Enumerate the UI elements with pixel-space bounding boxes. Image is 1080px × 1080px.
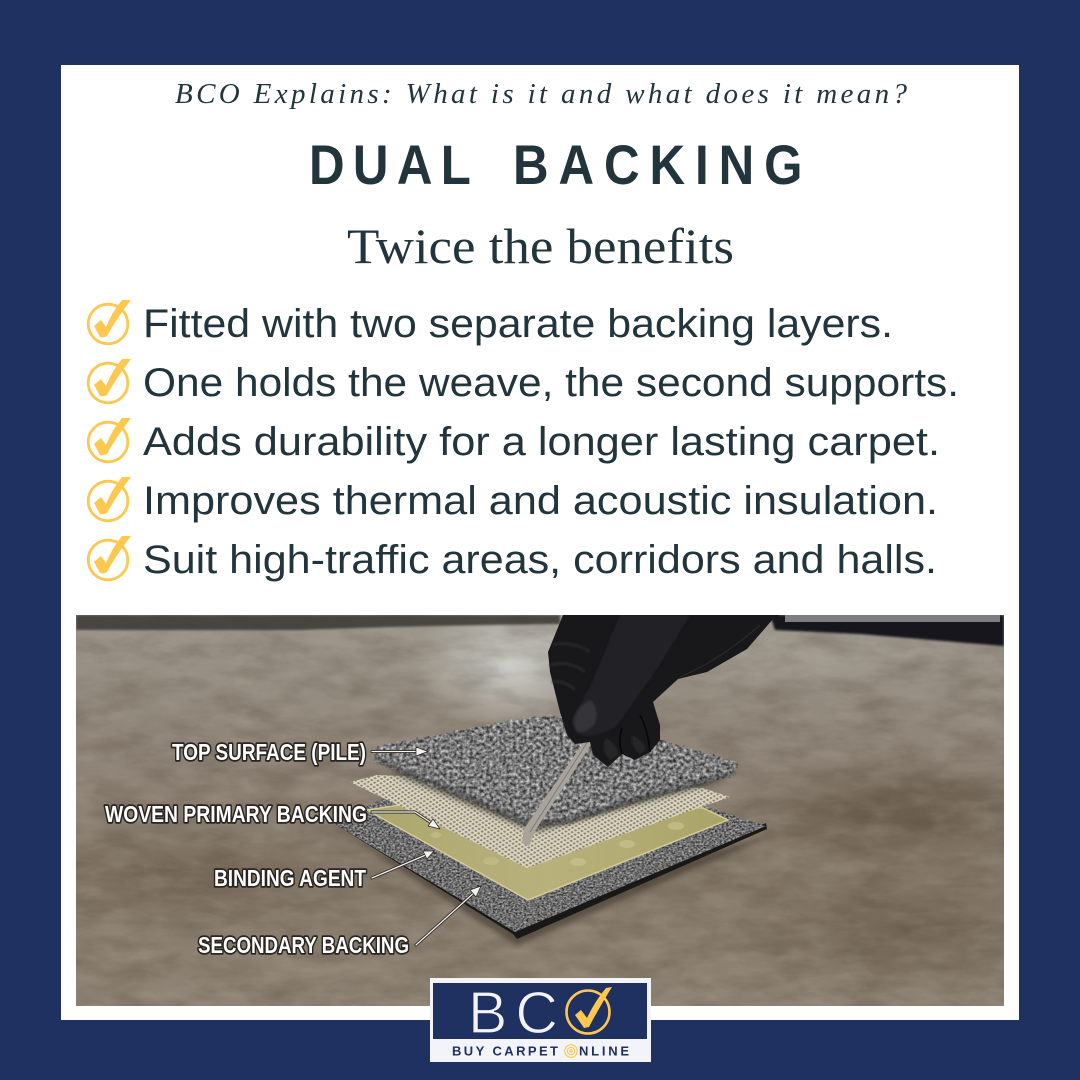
logo: Buy Carpet Online: [430, 978, 651, 1062]
label: top surface: TOP SURFACE (PILE): [172, 739, 366, 765]
label: binding agent: BINDING AGENT: [214, 865, 366, 891]
benefit 2: One holds the weave, the second supports.: [143, 361, 959, 405]
logo spiral O: [565, 1045, 577, 1057]
index finger wrinkles: [550, 644, 590, 690]
benefit 4: Improves thermal and acoustic insulation.: [143, 479, 938, 523]
label: woven primary backing: WOVEN PRIMARY BACKING: [105, 801, 367, 827]
top carpet shadow: [390, 770, 725, 832]
tool: [522, 737, 594, 846]
photo labels: [105, 739, 409, 958]
tagline: BCO Explains: What is it and what does it mean?: [175, 78, 907, 110]
logo letters BC: BC: [468, 980, 558, 1046]
benefit 1: Fitted with two separate backing layers.: [143, 302, 893, 346]
panel: white card: [61, 65, 1019, 1020]
background dark strip: [76, 615, 560, 630]
benefits list: [88, 300, 959, 582]
top surface pile: [372, 715, 737, 827]
binding agent layer: [367, 804, 730, 901]
logo wordmark end: NLINE: [579, 1044, 629, 1058]
secondary backing layer: [333, 790, 767, 939]
callout arrows: [372, 747, 481, 945]
title: [309, 134, 803, 197]
logo check icon: [566, 987, 612, 1034]
thumb: [572, 615, 690, 736]
folded fingers: [620, 715, 650, 754]
title: DUAL: [309, 134, 471, 197]
gloved hand: [548, 615, 780, 767]
label: secondary backing: SECONDARY BACKING: [198, 932, 409, 958]
benefit 5: Suit high-traffic areas, corridors and halls.: [143, 538, 937, 582]
logo wordmark: BUY CARPET: [452, 1044, 558, 1058]
title: BACKING: [513, 134, 803, 197]
photo: carpet layers on concrete floor: [76, 615, 1004, 1006]
floor shadow: [333, 826, 775, 946]
benefit 3: Adds durability for a longer lasting carpet.: [143, 420, 940, 464]
woven primary backing layer: [350, 775, 730, 868]
subtitle: Twice the benefits: [347, 218, 734, 274]
